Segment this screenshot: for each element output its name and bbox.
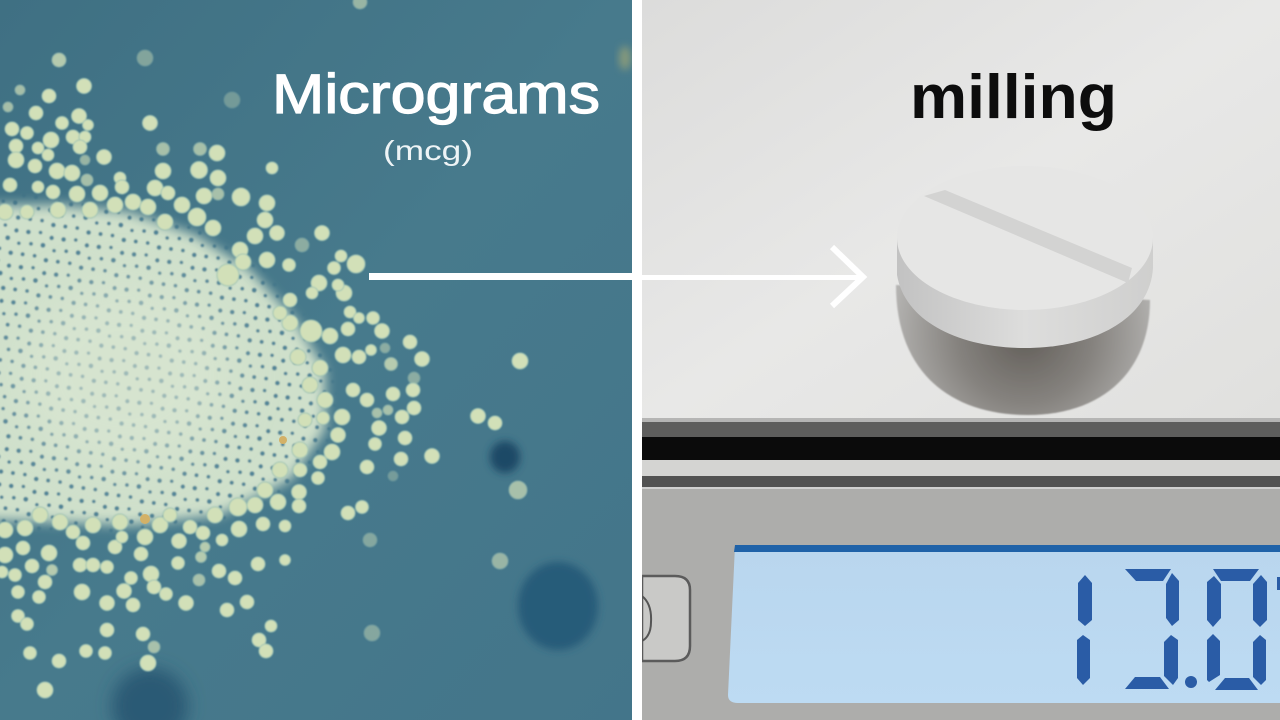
icon: scored tablet	[897, 166, 1153, 348]
arrow: micrograms to milling	[642, 247, 863, 306]
scattered microgram particles	[0, 0, 528, 698]
center divider	[632, 0, 642, 720]
out-of-focus dark spots	[112, 46, 631, 720]
heading: milling: milling	[910, 63, 1117, 132]
scale body	[642, 489, 1280, 720]
panel: micrograms	[0, 0, 632, 720]
panel: milling scale	[642, 0, 1280, 720]
scale button	[642, 576, 690, 661]
dense particle cluster	[0, 196, 334, 534]
subheading: mcg: (mcg)	[383, 135, 473, 166]
heading: Micrograms: Micrograms	[272, 62, 600, 125]
arrow shaft: left segment	[369, 273, 632, 280]
display reading	[1077, 569, 1280, 690]
scale platform edge	[642, 418, 1280, 489]
golden grains	[140, 436, 287, 524]
tablet shadow	[896, 285, 1150, 415]
LCD display	[728, 545, 1280, 703]
